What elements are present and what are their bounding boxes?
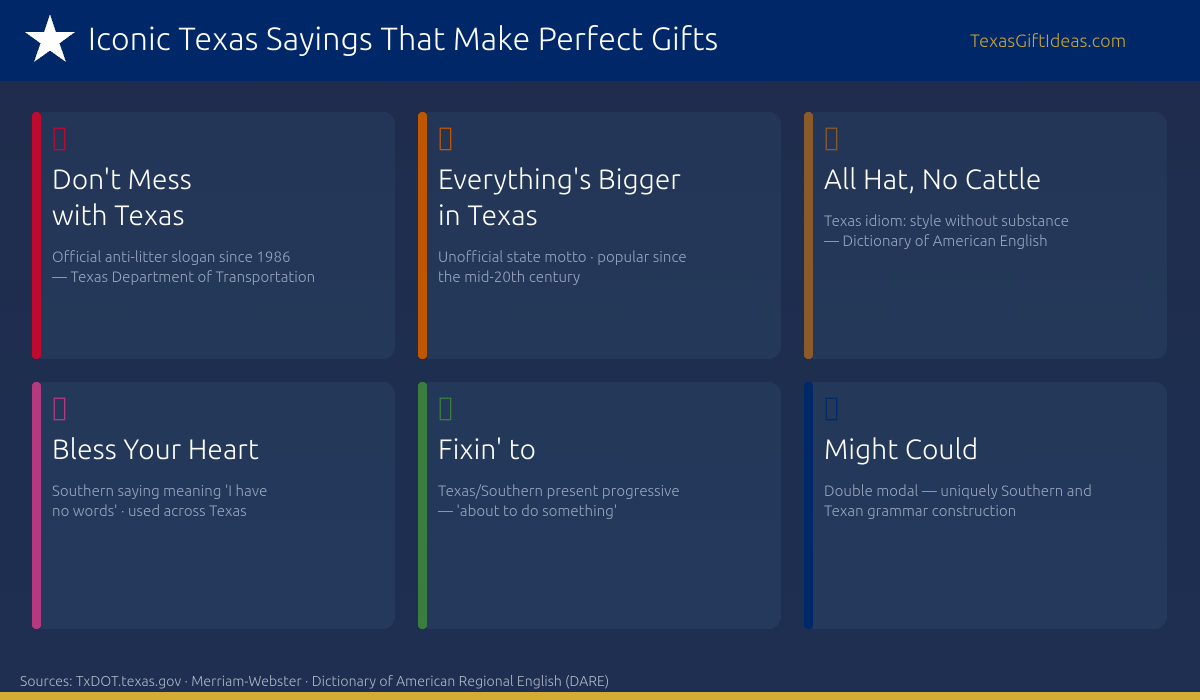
description [438, 248, 687, 285]
panel: Don't Mess with Texas [32, 112, 395, 359]
panel: Fixin' to [418, 382, 781, 629]
panel: Might Could [804, 382, 1167, 629]
saying heading: Don't Mess [52, 164, 192, 195]
site name: TexasGiftIdeas.com [970, 31, 1126, 51]
saying heading [438, 164, 681, 231]
description [438, 482, 680, 519]
card shape with accent bar and icon box [418, 382, 781, 629]
description: — 'about to do something' [438, 502, 617, 519]
description [52, 248, 315, 285]
card shape with accent bar and icon box [32, 112, 395, 359]
card shape with accent bar and icon box [804, 382, 1167, 629]
saying heading [52, 164, 192, 231]
description: no words' · used across Texas [52, 502, 247, 519]
panel: Bless Your Heart [32, 382, 395, 629]
icon: white star [25, 15, 75, 62]
saying heading: Might Could [824, 434, 978, 465]
description: Southern saying meaning 'I have [52, 482, 267, 499]
sources footer: Sources: TxDOT.texas.gov · Merriam-Webster · Dictionary of American Regional English (DARE) [20, 673, 609, 689]
card shape with accent bar and icon box [32, 382, 395, 629]
description [824, 212, 1069, 249]
description: Unofficial state motto · popular since [438, 248, 687, 265]
title: Iconic Texas Sayings That Make Perfect Gifts [88, 21, 718, 57]
panel: All Hat, No Cattle [804, 112, 1167, 359]
card shape with accent bar and icon box [418, 112, 781, 359]
saying heading: Everything's Bigger [438, 164, 681, 195]
description: Double modal — uniquely Southern and [824, 482, 1092, 499]
description: — Texas Department of Transportation [52, 268, 315, 285]
saying heading: Bless Your Heart [52, 434, 259, 465]
saying heading: with Texas [52, 200, 185, 231]
description: Texas/Southern present progressive [438, 482, 680, 499]
description: Texan grammar construction [824, 502, 1016, 519]
description [52, 482, 267, 519]
header band [0, 0, 1200, 81]
description: Official anti-litter slogan since 1986 [52, 248, 291, 265]
description [824, 482, 1092, 519]
description: — Dictionary of American English [824, 232, 1048, 249]
description: Texas idiom: style without substance [824, 212, 1069, 229]
gold bottom strip [0, 692, 1200, 700]
saying heading: in Texas [438, 200, 538, 231]
saying heading: Fixin' to [438, 434, 536, 465]
saying heading: All Hat, No Cattle [824, 164, 1041, 195]
description: the mid-20th century [438, 268, 580, 285]
card shape with accent bar and icon box [804, 112, 1167, 359]
panel: Everything's Bigger in Texas [418, 112, 781, 359]
